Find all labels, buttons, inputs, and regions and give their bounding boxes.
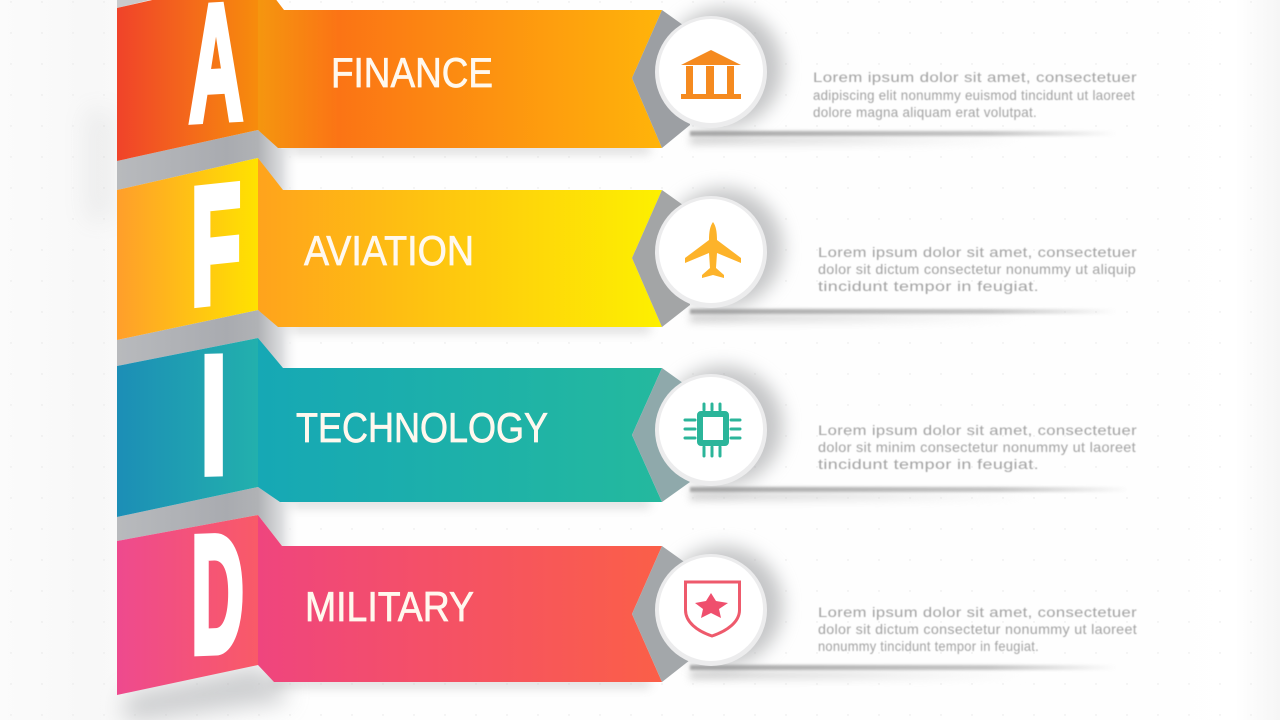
ribbon: military bbox=[117, 501, 662, 695]
letter D: D bbox=[192, 501, 244, 687]
flap: military letter panel bbox=[117, 515, 258, 695]
text: military description: dolor sit dictum consectetur nonummy ut laoreet bbox=[818, 621, 1137, 637]
icon: chip bbox=[685, 404, 740, 456]
node: technology bbox=[632, 366, 1130, 502]
grey fold strips between ribbons bbox=[85, 0, 650, 720]
flap: aviation letter panel bbox=[117, 158, 258, 340]
icon: bank bbox=[681, 50, 741, 99]
node: finance bbox=[632, 8, 1115, 148]
icon: shield with star bbox=[686, 582, 740, 636]
label: finance: FINANCE bbox=[331, 49, 493, 96]
text: aviation description: dolor sit dictum consectetur nonummy ut aliquip bbox=[818, 261, 1136, 277]
text: finance description bbox=[813, 69, 1137, 120]
flap: technology letter panel bbox=[117, 338, 258, 517]
ribbon: technology bbox=[117, 319, 662, 517]
text: technology description: Lorem ipsum dolor sit amet, consectetuer bbox=[818, 422, 1137, 438]
text: military description: nonummy tincidunt tempor in feugiat. bbox=[818, 638, 1039, 654]
text: technology description bbox=[818, 422, 1137, 472]
node: aviation bbox=[632, 188, 1115, 327]
text: finance description: Lorem ipsum dolor sit amet, consectetuer bbox=[813, 69, 1137, 85]
text: aviation description bbox=[818, 244, 1137, 294]
text: technology description: dolor sit minim consectetur nonummy ut laoreet bbox=[818, 439, 1136, 455]
text: military description: Lorem ipsum dolor sit amet, consectetuer bbox=[818, 604, 1137, 620]
text: aviation description: Lorem ipsum dolor sit amet, consectetuer bbox=[818, 244, 1137, 260]
band: aviation bbox=[258, 158, 662, 327]
flap: finance letter panel bbox=[117, 0, 258, 161]
text: technology description: tincidunt tempor in feugiat. bbox=[818, 456, 1039, 472]
letter F: F bbox=[191, 149, 241, 339]
band: military bbox=[258, 515, 662, 682]
ribbon: aviation bbox=[117, 149, 662, 340]
text: military description bbox=[818, 604, 1137, 654]
text: finance description: dolore magna aliquam erat volutpat. bbox=[813, 104, 1037, 120]
letter I: I bbox=[200, 319, 228, 510]
label: aviation: AVIATION bbox=[304, 227, 474, 274]
label: technology: TECHNOLOGY bbox=[296, 404, 548, 451]
text: finance description: adipiscing elit nonummy euismod tincidunt ut laoreet bbox=[813, 87, 1135, 103]
ribbon: finance bbox=[117, 0, 662, 161]
node: military bbox=[632, 546, 1115, 682]
band: technology bbox=[258, 338, 662, 502]
text: aviation description: tincidunt tempor in feugiat. bbox=[818, 278, 1039, 294]
icon: plane bbox=[685, 222, 741, 278]
band: finance bbox=[258, 0, 662, 148]
label: military: MILITARY bbox=[305, 583, 474, 630]
